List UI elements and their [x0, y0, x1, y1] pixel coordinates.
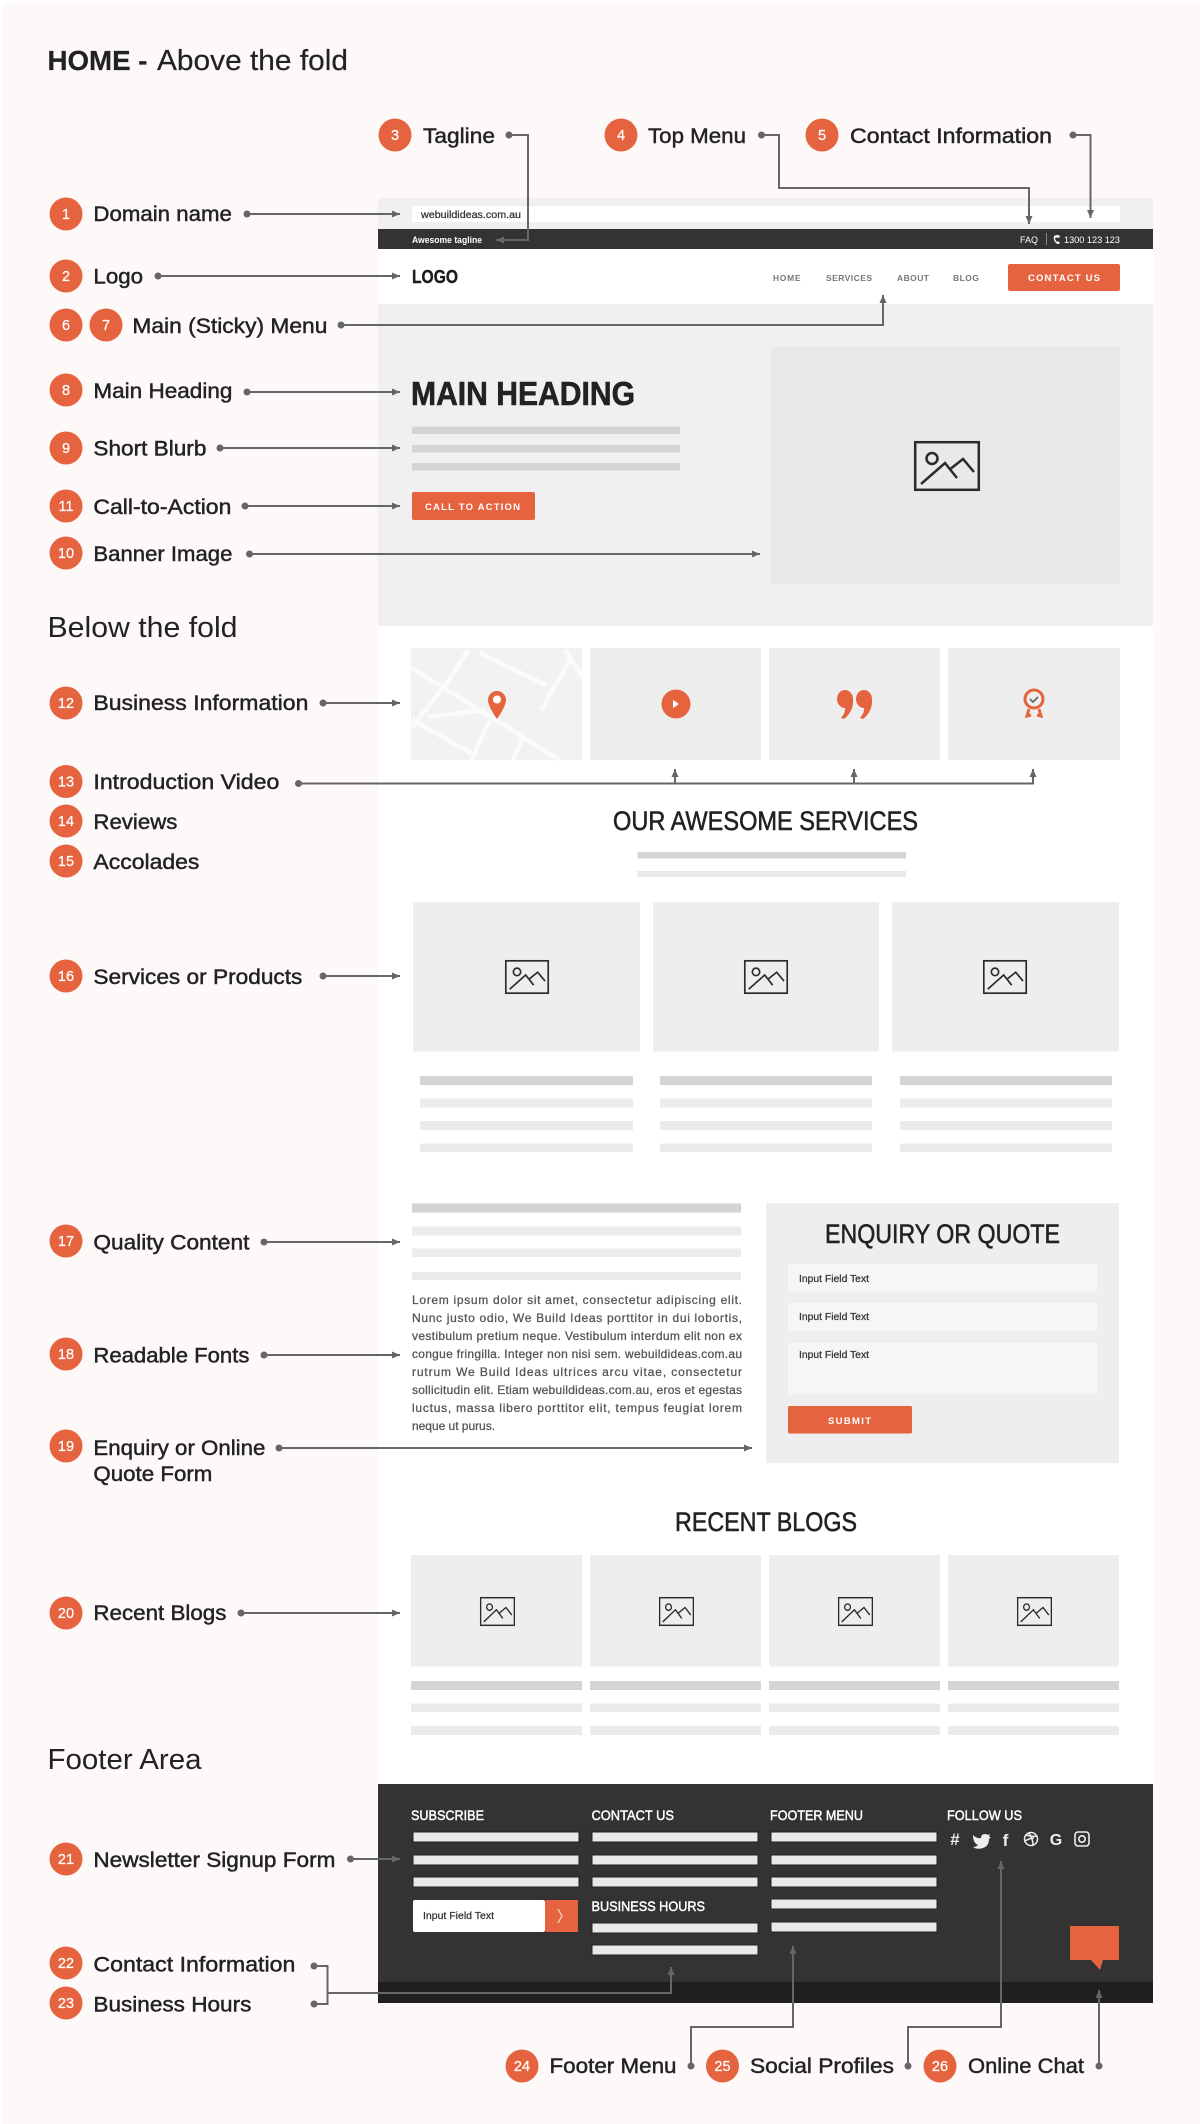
badge 9	[50, 432, 82, 464]
map tile	[411, 648, 582, 760]
callout 20: recent blogs	[50, 1596, 400, 1630]
badge 3: 3	[391, 128, 399, 144]
badge 5	[806, 118, 838, 152]
main menu: SERVICES	[826, 273, 872, 283]
business information tiles	[411, 648, 1120, 760]
social icons: #	[950, 1830, 960, 1849]
newsletter input	[413, 1900, 578, 1932]
social icons: G	[1050, 1832, 1062, 1849]
arrow	[220, 447, 400, 449]
badge 22: 22	[58, 1956, 74, 1972]
services heading	[613, 806, 918, 877]
reviews tile	[769, 648, 940, 760]
badge 20: 20	[58, 1606, 74, 1622]
callout 12: business information	[50, 686, 400, 720]
arrow	[158, 275, 400, 277]
main menu: HOME	[773, 273, 801, 283]
badge 26	[924, 2050, 956, 2082]
arrow	[314, 1966, 671, 2004]
callout 21: newsletter signup form	[50, 1842, 400, 1876]
badge 8: 8	[62, 383, 70, 399]
callout 2: logo	[50, 260, 400, 292]
section heading: below the fold: Below the fold	[48, 612, 238, 644]
lorem ipsum paragraph: congue fringilla. Integer non nisi sem. webuildideas.com.au	[412, 1347, 742, 1361]
arrows	[298, 769, 1033, 784]
callout 19: enquiry or online quote form	[50, 1430, 752, 1486]
label: Quality Content: Quality Content	[93, 1232, 250, 1254]
badge 14: 14	[58, 814, 74, 830]
badge 15: 15	[58, 854, 74, 870]
badge 18	[50, 1338, 82, 1370]
badge 2	[50, 260, 82, 292]
badge 5: 5	[818, 128, 826, 144]
label: Logo: Logo	[93, 266, 143, 288]
arrow	[323, 702, 400, 704]
badge 16: 16	[58, 969, 74, 985]
callout 4: top menu	[604, 118, 1029, 224]
arrow	[341, 295, 883, 325]
badge 25	[706, 2050, 739, 2082]
title: Above the fold	[157, 45, 348, 77]
label: Footer Menu: Footer Menu	[550, 2055, 676, 2078]
label: Recent Blogs: Recent Blogs	[93, 1602, 226, 1625]
label: Main Heading: Main Heading	[93, 380, 232, 403]
arrow	[762, 135, 1029, 224]
badge 14	[50, 804, 82, 838]
badge 26: 26	[932, 2059, 948, 2075]
main menu	[378, 249, 1153, 304]
badge 19: 19	[58, 1439, 74, 1455]
badge 10	[50, 536, 82, 570]
label: Business Hours: Business Hours	[93, 1994, 251, 2016]
badge 1: 1	[62, 207, 70, 223]
main menu: BLOG	[953, 273, 979, 283]
services cards	[413, 902, 1119, 1152]
badge 11	[50, 490, 82, 522]
arrow	[1098, 1990, 1100, 2066]
enquiry form: Input Field Text	[799, 1312, 869, 1323]
footer headings: SUBSCRIBE	[411, 1807, 484, 1823]
callout 17: quality content	[50, 1224, 400, 1258]
footer link bars	[413, 1832, 937, 1955]
main heading: MAIN HEADING	[411, 375, 635, 412]
arrow	[247, 391, 400, 393]
badge 10: 10	[58, 546, 74, 562]
badge 12	[50, 686, 82, 720]
arrow	[691, 1946, 793, 2066]
recent blogs	[411, 1507, 1119, 1735]
arrow	[1073, 135, 1090, 218]
callouts 22 and 23: contact information and business hours	[50, 1946, 671, 2020]
badge 9: 9	[62, 441, 70, 457]
arrow	[908, 1861, 1001, 2066]
label: Top Menu: Top Menu	[648, 125, 746, 148]
call to action button: CALL TO ACTION	[425, 502, 520, 513]
social icons	[950, 1830, 1089, 1850]
lorem ipsum paragraph: Nunc justo odio, We Build Ideas porttitor in dui lobortis,	[412, 1311, 742, 1325]
label: Reviews: Reviews	[93, 811, 177, 834]
browser address bar: webuildideas.com.au	[420, 210, 521, 221]
callouts 13 to 15: video, reviews, accolades	[50, 765, 1033, 878]
short blurb	[412, 426, 680, 470]
browser address bar	[378, 198, 1153, 229]
label: Call-to-Action: Call-to-Action	[93, 496, 231, 519]
top bar: Awesome tagline	[412, 235, 482, 246]
badge 18: 18	[58, 1347, 74, 1363]
label: Banner Image: Banner Image	[93, 543, 232, 566]
enquiry form: SUBMIT	[828, 1416, 871, 1427]
footer headings: BUSINESS HOURS	[592, 1898, 705, 1914]
badge 19	[50, 1430, 82, 1462]
top bar: FAQ	[1020, 235, 1038, 246]
arrow	[264, 1241, 400, 1243]
badge 24	[506, 2050, 538, 2082]
label: Business Information: Business Information	[93, 692, 308, 715]
callout 10: banner image	[50, 536, 760, 570]
callout 1: domain name	[50, 198, 400, 230]
label: Contact Information: Contact Information	[93, 1954, 295, 1976]
hero section	[378, 304, 1153, 626]
top bar: 1300 123 123	[1064, 235, 1120, 246]
callout 25: social profiles	[706, 1861, 1001, 2082]
callout 11: call to action	[50, 490, 400, 522]
badge 20	[50, 1596, 82, 1630]
callout 18: readable fonts	[50, 1338, 400, 1370]
label: Accolades: Accolades	[93, 851, 199, 874]
badge 15	[50, 844, 82, 878]
enquiry form: Input Field Text	[799, 1274, 869, 1285]
label: Readable Fonts: Readable Fonts	[93, 1344, 249, 1368]
arrow	[350, 1858, 400, 1860]
arrow	[245, 505, 400, 507]
lorem ipsum paragraph: neque ut purus.	[412, 1419, 495, 1433]
label: Enquiry or Online Quote Form: Quote Form	[93, 1463, 212, 1486]
callout 3: tagline	[378, 118, 528, 240]
main menu: ABOUT	[897, 273, 930, 283]
badge 23	[50, 1986, 82, 2020]
newsletter input: Input Field Text	[423, 1911, 494, 1922]
arrow	[323, 975, 400, 977]
badge 16	[50, 960, 82, 992]
panel: website wireframe	[378, 198, 1153, 1784]
label: Online Chat: Online Chat	[968, 2055, 1084, 2078]
services heading: OUR AWESOME SERVICES	[613, 806, 918, 836]
callout 26: online chat	[924, 1990, 1099, 2082]
chat bubble	[1070, 1926, 1119, 1970]
recent blogs: RECENT BLOGS	[675, 1507, 857, 1537]
arrow	[264, 1354, 400, 1356]
main menu: CONTACT US	[1028, 273, 1100, 284]
badge 7	[90, 308, 122, 342]
arrow	[250, 553, 760, 555]
main menu: LOGO	[412, 267, 458, 287]
label: Contact Information: Contact Information	[850, 125, 1052, 148]
enquiry form: ENQUIRY OR QUOTE	[825, 1219, 1060, 1249]
video tile	[590, 648, 761, 760]
title: HOME -	[48, 45, 148, 76]
enquiry form: Input Field Text	[799, 1350, 869, 1361]
footer headings: FOOTER MENU	[770, 1807, 863, 1823]
callout 6 and 7: main sticky menu	[50, 295, 883, 342]
label: Domain name: Domain name	[93, 203, 232, 226]
label: Main (Sticky) Menu: Main (Sticky) Menu	[132, 315, 327, 338]
footer headings: FOLLOW US	[947, 1807, 1022, 1823]
badge 17: 17	[58, 1234, 74, 1250]
label: Tagline: Tagline	[423, 125, 495, 148]
label: Social Profiles: Social Profiles	[750, 2055, 894, 2078]
badge 21	[50, 1842, 82, 1876]
badge 13: 13	[58, 774, 74, 790]
badge 6	[50, 308, 82, 342]
top bar	[378, 229, 1153, 249]
footer headings	[411, 1807, 1022, 1914]
call to action button	[412, 492, 535, 520]
callout 5: contact information	[806, 118, 1090, 218]
content block	[412, 1204, 742, 1433]
lorem ipsum paragraph	[412, 1293, 742, 1433]
badge 12: 12	[58, 696, 74, 712]
label: Newsletter Signup Form: Newsletter Signup Form	[93, 1849, 335, 1872]
accolades tile	[948, 648, 1120, 760]
badge 25: 25	[714, 2059, 731, 2075]
badge 6: 6	[62, 318, 70, 334]
banner image	[771, 347, 1120, 584]
lorem ipsum paragraph: luctus, massa libero porttitor elit, tempus feugiat lorem	[412, 1401, 742, 1415]
badge 3	[378, 118, 412, 152]
badge 4	[604, 118, 638, 152]
panel: footer	[378, 1784, 1153, 2003]
callout 8: main heading	[50, 374, 400, 406]
section heading: footer area: Footer Area	[48, 1744, 202, 1776]
callout 9: short blurb	[50, 432, 400, 464]
badge 21: 21	[58, 1852, 74, 1868]
label: Introduction Video: Introduction Video	[93, 771, 279, 794]
badge 8	[50, 374, 82, 406]
arrow	[496, 135, 528, 240]
badge 11: 11	[58, 499, 74, 515]
badge 24: 24	[514, 2059, 530, 2075]
enquiry form	[766, 1203, 1119, 1463]
badge 2: 2	[62, 269, 70, 285]
badge 7: 7	[102, 318, 110, 334]
badge 23: 23	[58, 1996, 74, 2012]
social icons: f	[1003, 1831, 1009, 1850]
arrow	[279, 1447, 752, 1449]
badge 13	[50, 765, 82, 798]
lorem ipsum paragraph: rutrum We Build Ideas ultrices arcu vitae, consectetur	[412, 1365, 742, 1379]
badge 22	[50, 1946, 82, 1980]
label: Services or Products: Services or Products	[93, 966, 302, 989]
footer headings: CONTACT US	[592, 1807, 674, 1823]
lorem ipsum paragraph: Lorem ipsum dolor sit amet, consectetur adipiscing elit.	[412, 1293, 742, 1307]
label: Short Blurb: Short Blurb	[93, 438, 206, 460]
badge 17	[50, 1224, 82, 1258]
lorem ipsum paragraph: sollicitudin elit. Etiam webuildideas.com.au, eros et egestas	[412, 1383, 742, 1397]
callout 24: footer menu	[506, 1946, 793, 2082]
lorem ipsum paragraph: vestibulum pretium neque. Vestibulum interdum elit non ex	[412, 1329, 742, 1343]
label: Enquiry or Online Quote Form: Enquiry or Online	[93, 1437, 265, 1460]
arrow	[247, 213, 400, 215]
callout 16: services or products	[50, 960, 400, 992]
badge 1	[50, 198, 82, 230]
badge 4: 4	[617, 128, 625, 144]
arrow	[241, 1612, 400, 1614]
